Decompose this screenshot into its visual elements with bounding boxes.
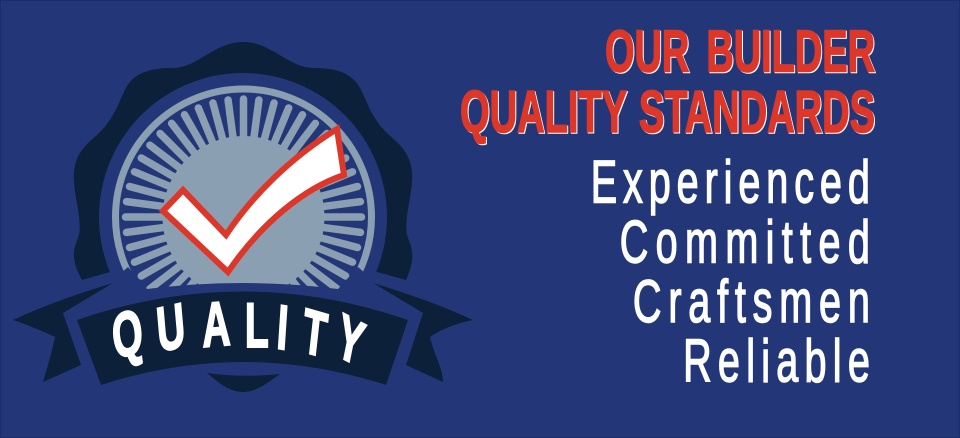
ribbon label: QUALITY	[108, 289, 370, 381]
list of qualities	[591, 148, 870, 394]
blue cut-out above ribbon	[90, 267, 396, 340]
list item: Craftsmen: Craftsmen	[633, 268, 870, 335]
list item: Experienced: Experienced	[591, 148, 870, 215]
blue disk	[99, 73, 387, 361]
ribbon left tail	[13, 283, 113, 382]
icon: check mark	[163, 129, 344, 272]
heading	[460, 18, 875, 145]
quality badge	[13, 42, 473, 392]
list item: Committed: Committed	[620, 208, 870, 275]
icon: scalloped seal bottom	[207, 373, 280, 392]
gray ring	[116, 89, 372, 345]
icon: scalloped seal	[74, 42, 412, 280]
list item: Reliable: Reliable	[683, 327, 870, 394]
ribbon main band	[77, 292, 408, 385]
sunburst rays	[126, 99, 362, 311]
ribbon right tail	[373, 283, 473, 382]
gray centre disk	[162, 136, 324, 298]
